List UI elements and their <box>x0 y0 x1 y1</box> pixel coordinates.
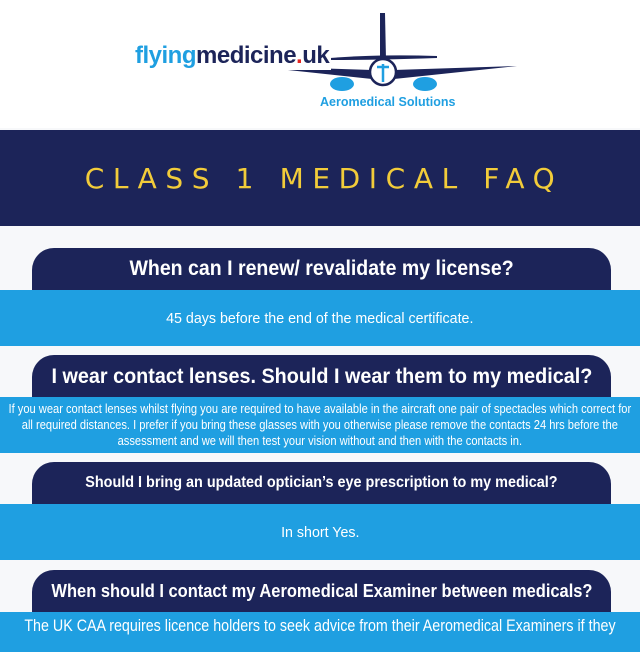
question 2 <box>32 355 611 397</box>
answer 4: The UK CAA requires licence holders to seek advice from their Aeromedical Examiners if they <box>24 616 616 635</box>
answer 2: all required distances. I prefer if you bring these glasses with you otherwise please remove the contacts 24 hrs before the <box>22 418 618 432</box>
question 1 <box>32 248 611 290</box>
question 1: When can I renew/ revalidate my license? <box>129 257 514 280</box>
answer 4 <box>0 612 640 652</box>
answer 2 <box>0 397 640 453</box>
answer 2: If you wear contact lenses whilst flying you are required to have available in the aircraft one pair of spectacles which correct for <box>9 402 631 416</box>
answer 1 <box>0 290 640 346</box>
answer 1: 45 days before the end of the medical certificate. <box>166 310 474 326</box>
title band <box>0 130 640 226</box>
title: CLASS 1 MEDICAL FAQ <box>85 162 563 194</box>
question 3 <box>32 462 611 504</box>
icon: plane <box>288 13 516 91</box>
question 4: When should I contact my Aeromedical Examiner between medicals? <box>51 580 592 601</box>
answer 3 <box>0 504 640 560</box>
header: logo <box>0 0 640 128</box>
answer 2: assessment and we will then test your vision without and then with the contacts in. <box>118 434 522 448</box>
question 3: Should I bring an updated optician’s eye prescription to my medical? <box>85 474 558 491</box>
question 4 <box>32 570 611 612</box>
answer 3: In short Yes. <box>281 524 359 540</box>
logo text: flyingmedicine.uk <box>135 42 329 69</box>
question 2: I wear contact lenses. Should I wear them to my medical? <box>51 364 592 388</box>
tagline: Aeromedical Solutions <box>320 95 455 109</box>
